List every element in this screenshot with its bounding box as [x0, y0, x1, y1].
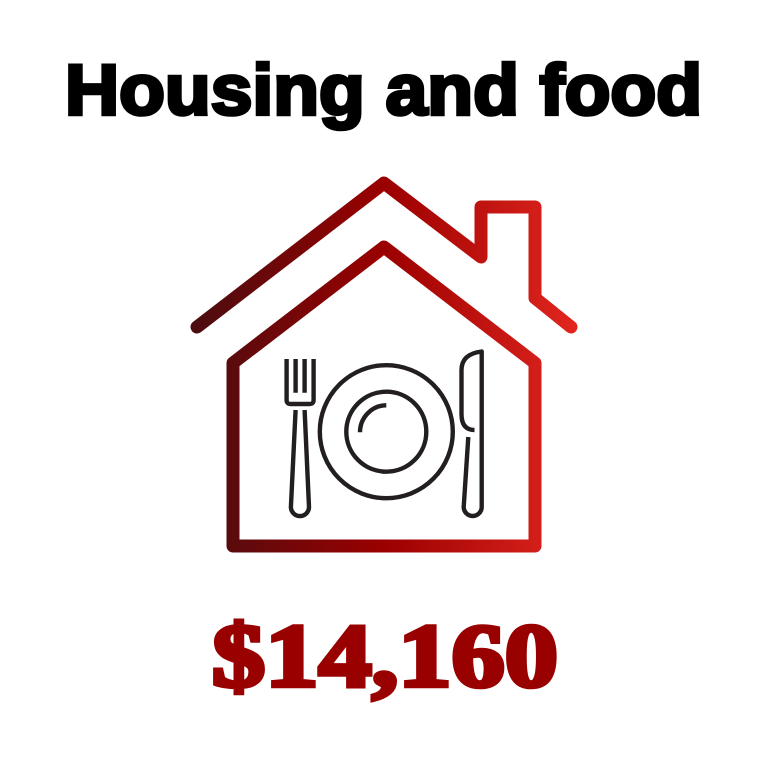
icon: house with plate and cutlery [197, 183, 571, 546]
icon: roof and chimney [197, 183, 571, 327]
icon: house outline [233, 247, 535, 546]
icon: plate [320, 365, 453, 498]
icon: knife [462, 352, 482, 516]
icon: fork [287, 359, 314, 516]
title: Housing and food [65, 52, 702, 130]
amount: $14,160 [212, 607, 558, 706]
